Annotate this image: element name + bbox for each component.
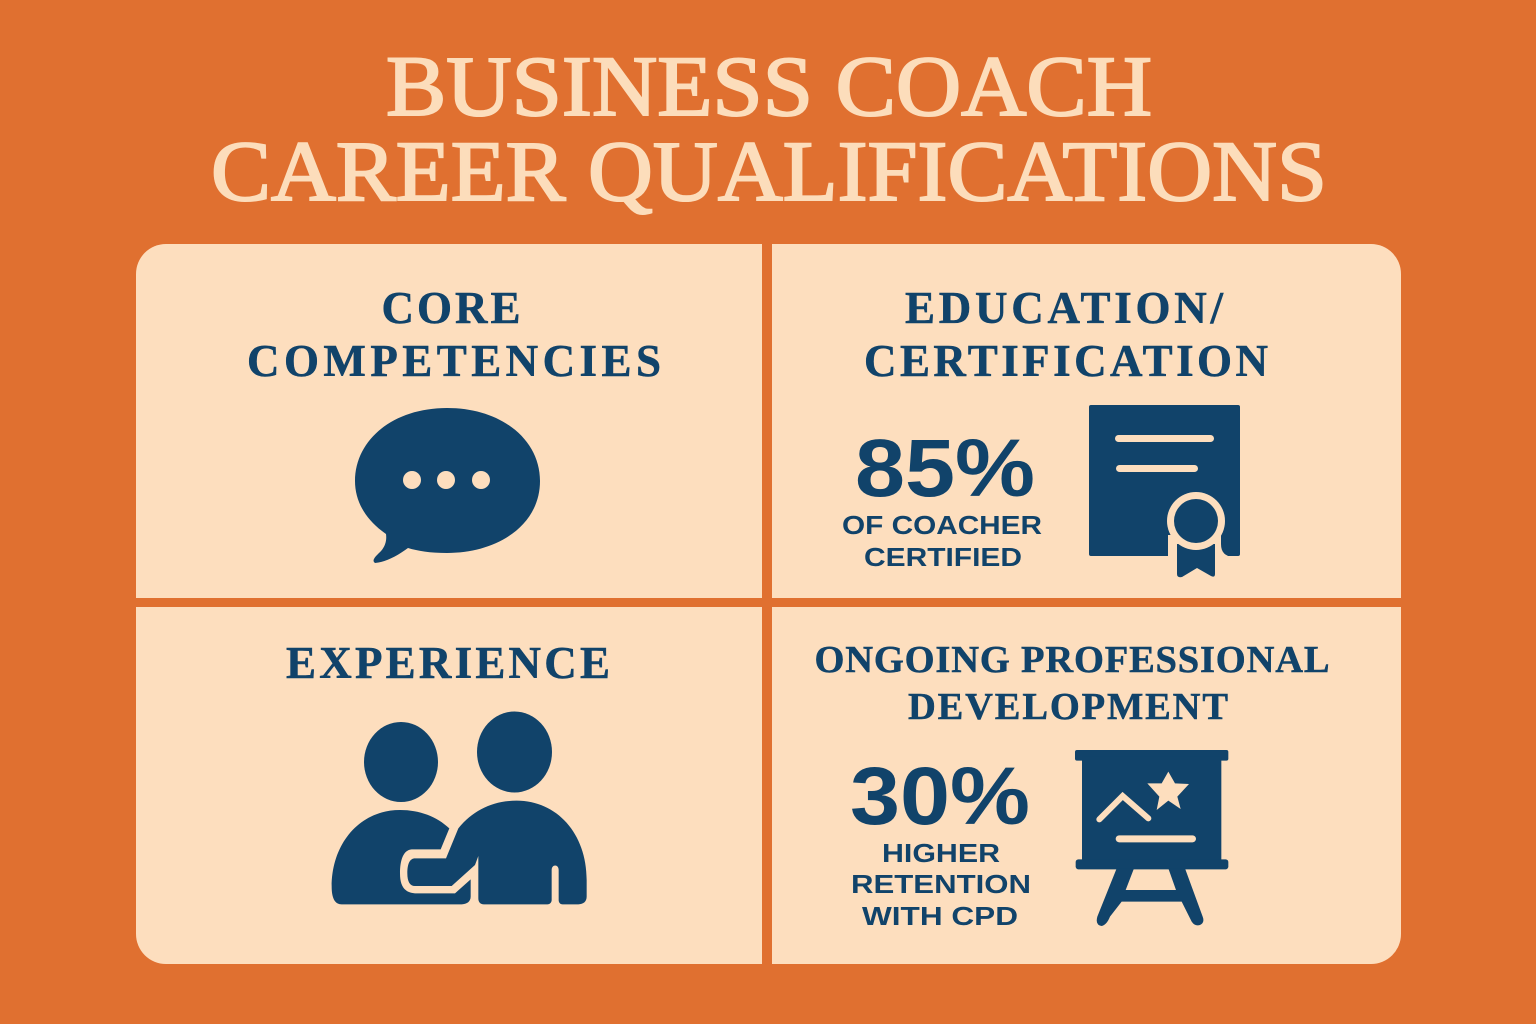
title: BUSINESS COACH [386,38,1152,134]
heading: ongoing professional development: DEVELOPMENT [908,686,1228,728]
stat: 30 percent: 30% [850,751,1030,842]
title: CAREER QUALIFICATIONS [211,123,1327,219]
icon: speech bubble [355,408,540,563]
heading: education certification: EDUCATION/ [905,283,1223,333]
stat: 30 percent: HIGHER [882,838,1000,868]
stat: 30 percent: WITH CPD [862,901,1018,931]
panel: education certification [772,244,1401,598]
heading: ongoing professional development [814,639,1330,728]
stat: 30 percent: RETENTION [851,869,1031,899]
stat: 85 percent [842,423,1042,572]
heading: core competencies: COMPETENCIES [247,336,661,386]
heading: core competencies: CORE [382,283,520,333]
stat: 85 percent: OF COACHER [842,510,1042,540]
stat: 85 percent: 85% [855,423,1035,514]
icon: two people [332,712,587,904]
panel: core competencies [136,244,762,598]
stat: 30 percent [850,751,1031,931]
heading: experience: EXPERIENCE [286,638,610,688]
stat: 85 percent: CERTIFIED [864,542,1022,572]
panel: experience [136,607,762,964]
heading: education certification [864,283,1268,386]
heading: education certification: CERTIFICATION [864,336,1268,386]
icon: certificate [1089,405,1240,577]
heading: core competencies [247,283,661,386]
heading: ongoing professional development: ONGOING PROFESSIONAL [814,639,1330,681]
panel: ongoing professional development [772,607,1401,964]
title [211,38,1327,219]
icon: presentation board [1075,750,1228,926]
